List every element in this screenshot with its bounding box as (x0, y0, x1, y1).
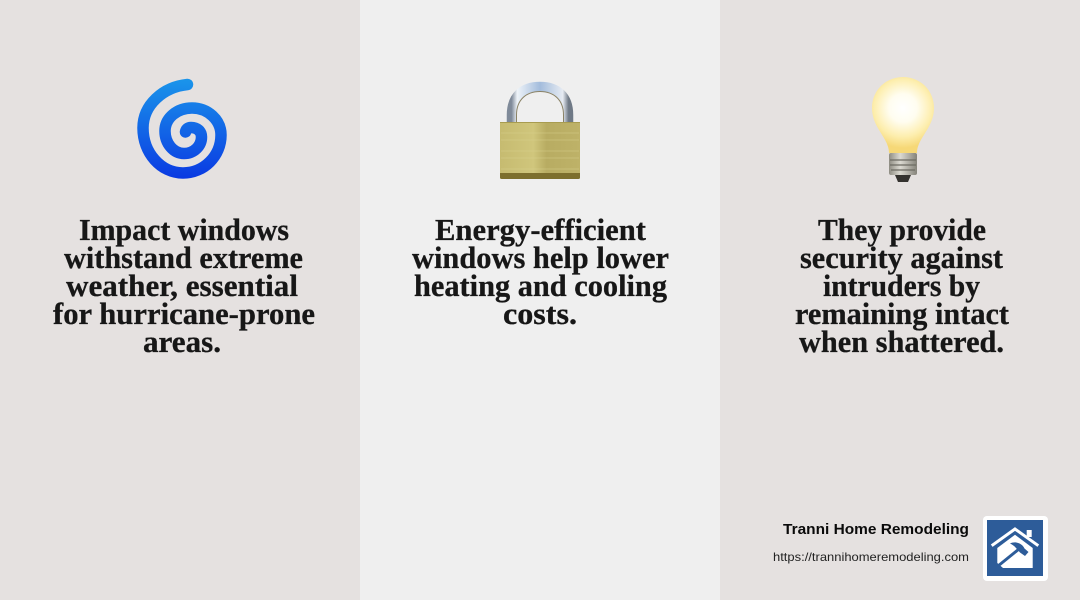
heading: impact windows text (53, 212, 315, 359)
heading: energy efficient text: costs. (503, 296, 577, 331)
heading: impact windows text: withstand extreme (64, 240, 303, 275)
heading: security text: remaining intact (795, 296, 1010, 331)
logo (983, 516, 1048, 581)
heading: energy efficient text (412, 212, 669, 331)
heading: security text (795, 212, 1010, 359)
heading: security text: security against (800, 240, 1004, 275)
heading: impact windows text: areas. (143, 324, 221, 359)
heading: impact windows text: for hurricane-prone (53, 296, 315, 331)
panel: energy efficient windows (360, 0, 720, 600)
heading: energy efficient text: windows help lower (412, 240, 669, 275)
heading: security text: when shattered. (799, 324, 1004, 359)
icon: blue spiral (143, 84, 221, 173)
icon: padlock (500, 86, 580, 179)
panel: security (720, 0, 1080, 600)
heading: security text: They provide (818, 212, 986, 247)
heading: security text: intruders by (823, 268, 980, 303)
company url: https://trannihomeremodeling.com (773, 550, 969, 564)
heading: impact windows text: Impact windows (79, 212, 289, 247)
panel: impact windows (0, 0, 360, 600)
heading: impact windows text: weather, essential (66, 268, 298, 303)
icon: light bulb (872, 77, 934, 182)
company name: Tranni Home Remodeling (783, 522, 969, 538)
heading: energy efficient text: Energy-efficient (435, 212, 647, 247)
heading: energy efficient text: heating and cooling (414, 268, 667, 303)
